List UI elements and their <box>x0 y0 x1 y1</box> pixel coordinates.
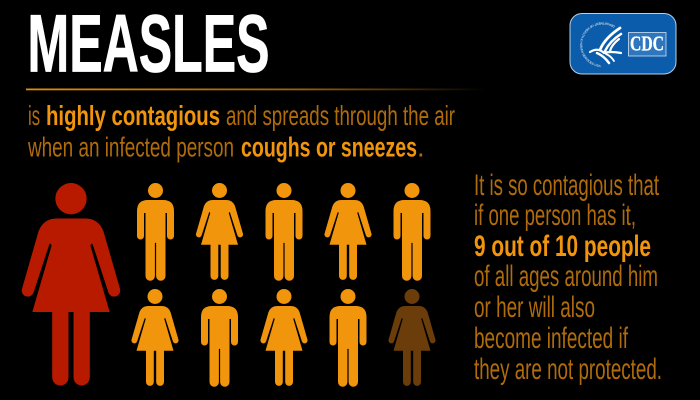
large red figure: infected person <box>22 183 120 386</box>
side text: or her will also <box>474 291 595 324</box>
people grid <box>131 183 436 387</box>
figure row 2 <box>131 289 436 387</box>
intro text: highly contagious <box>46 100 220 131</box>
figure row 1 <box>137 183 430 281</box>
logo eagle <box>590 28 621 63</box>
CDC logo <box>570 13 676 74</box>
logo ring text: DEPARTMENT OF HEALTH & HUMAN SERVICES USA <box>580 22 615 68</box>
intro text: and spreads through the air <box>226 100 455 131</box>
title: MEASLES <box>28 0 270 90</box>
intro text <box>27 100 455 162</box>
intro text: when an infected person <box>27 132 234 162</box>
side text <box>474 169 662 386</box>
intro text: is <box>28 100 40 131</box>
intro text: . <box>417 132 425 162</box>
logo CDC box: CDC <box>630 32 664 56</box>
intro text: coughs or sneezes <box>241 132 417 162</box>
